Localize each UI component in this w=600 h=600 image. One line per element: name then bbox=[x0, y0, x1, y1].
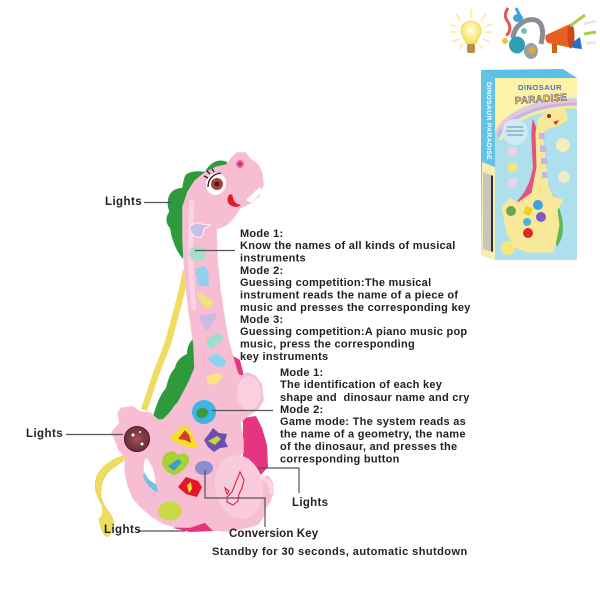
box rainbow bbox=[497, 101, 577, 132]
green crest bbox=[152, 160, 227, 422]
label: lights crest: Lights bbox=[105, 196, 142, 208]
text block: body modes: The identification of each key bbox=[280, 379, 443, 391]
text block: neck modes: instruments bbox=[240, 252, 306, 264]
text block: body modes: the name of a geometry, the name bbox=[280, 428, 466, 440]
text block: neck modes: Mode 1: bbox=[240, 228, 283, 240]
box title bbox=[514, 83, 568, 107]
text block: body modes: of the dinosaur, and presses the bbox=[280, 441, 457, 453]
text block: neck modes: key instruments bbox=[240, 351, 328, 363]
text block: body modes: corresponding button bbox=[280, 454, 400, 466]
text: standby note: Standby for 30 seconds, automatic shutdown bbox=[212, 546, 468, 558]
box title: DINOSAUR bbox=[518, 83, 562, 92]
box front bbox=[495, 78, 577, 260]
box title: PARADISE bbox=[514, 92, 568, 107]
box badge circles bbox=[501, 119, 570, 255]
box side title: DINOSAUR PARADISE bbox=[485, 82, 492, 160]
pointer lines bbox=[66, 202, 299, 531]
text block: body modes: Mode 2: bbox=[280, 404, 323, 416]
text block: neck modes: music and presses the corresponding key bbox=[240, 302, 471, 314]
box side panel bbox=[481, 70, 495, 260]
dinosaur body bbox=[112, 153, 273, 531]
label: lights gem: Lights bbox=[26, 428, 63, 440]
body hole bbox=[143, 458, 158, 492]
label: lights foot: Lights bbox=[292, 497, 328, 509]
text block: neck modes bbox=[240, 228, 471, 363]
text block: neck modes: Guessing competition:The musical bbox=[240, 277, 431, 289]
box yellow top bbox=[495, 78, 577, 132]
text block: body modes bbox=[280, 367, 470, 466]
product box bbox=[481, 69, 577, 260]
text block: neck modes: music, press the corresponding bbox=[240, 338, 415, 350]
label: conversion key: Conversion Key bbox=[229, 528, 319, 540]
label: lights bottom: Lights bbox=[104, 524, 141, 536]
icon: megaphones bbox=[545, 15, 596, 53]
face bbox=[203, 160, 263, 207]
text block: neck modes: Guessing competition:A piano music pop bbox=[240, 326, 467, 338]
strap bbox=[95, 270, 186, 537]
magenta rear body bbox=[173, 356, 268, 532]
icon: headphones with music notes bbox=[502, 8, 543, 59]
text block: body modes: Game mode: The system reads as bbox=[280, 416, 466, 428]
text block: neck modes: instrument reads the name of a piece of bbox=[240, 290, 458, 302]
text block: neck modes: Know the names of all kinds of musical bbox=[240, 240, 456, 252]
light gem bbox=[124, 426, 150, 452]
neck instrument buttons bbox=[189, 223, 226, 385]
text block: body modes: shape and dinosaur name and cry bbox=[280, 392, 470, 404]
icon: light bulb bbox=[450, 9, 492, 53]
box top flap bbox=[481, 69, 577, 78]
body game buttons bbox=[158, 400, 244, 520]
text block: neck modes: Mode 2: bbox=[240, 265, 283, 277]
box dinosaur bbox=[502, 108, 567, 252]
text block: body modes: Mode 1: bbox=[280, 367, 323, 379]
text block: neck modes: Mode 3: bbox=[240, 314, 283, 326]
